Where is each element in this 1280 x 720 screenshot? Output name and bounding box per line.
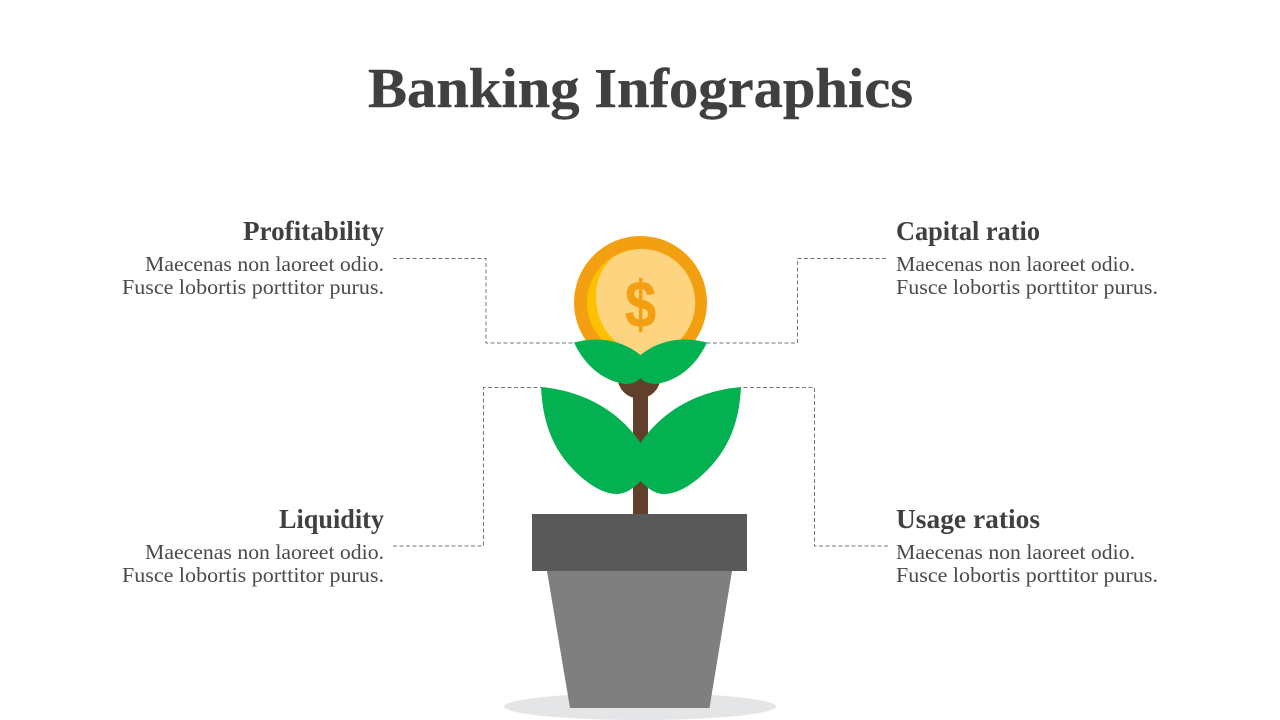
icon: small leaves [574,339,707,384]
text block: usage ratios [896,504,1158,587]
text block: liquidity: Liquidity [279,504,384,534]
text block: usage ratios: Maecenas non laoreet odio. [896,540,1135,564]
icon: dollar coin: $ [625,267,656,341]
text block: capital ratio: Fusce lobortis porttitor purus. [896,275,1158,299]
text block: capital ratio: Capital ratio [896,216,1040,246]
title: Banking Infographics [368,58,913,120]
pot rim [532,514,747,571]
icon: plant stem [618,356,660,515]
text block: profitability [122,216,385,299]
icon: dollar coin [574,236,707,369]
text block: liquidity: Fusce lobortis porttitor purus. [122,563,384,587]
text block: profitability: Profitability [243,216,385,246]
connector: profitability [393,258,575,343]
text block: usage ratios: Usage ratios [896,504,1040,534]
pot body [547,571,732,708]
connector: usage ratios [740,388,888,546]
text block: liquidity [122,504,384,587]
connector: capital ratio [706,258,886,343]
pot shadow [504,693,776,720]
connector: liquidity [393,388,542,546]
text block: capital ratio [896,216,1158,299]
text block: liquidity: Maecenas non laoreet odio. [145,540,384,564]
text block: usage ratios: Fusce lobortis porttitor purus. [896,563,1158,587]
text block: profitability: Fusce lobortis porttitor purus. [122,275,384,299]
text block: capital ratio: Maecenas non laoreet odio. [896,252,1135,276]
text block: profitability: Maecenas non laoreet odio. [145,252,384,276]
icon: large leaves [541,387,741,494]
